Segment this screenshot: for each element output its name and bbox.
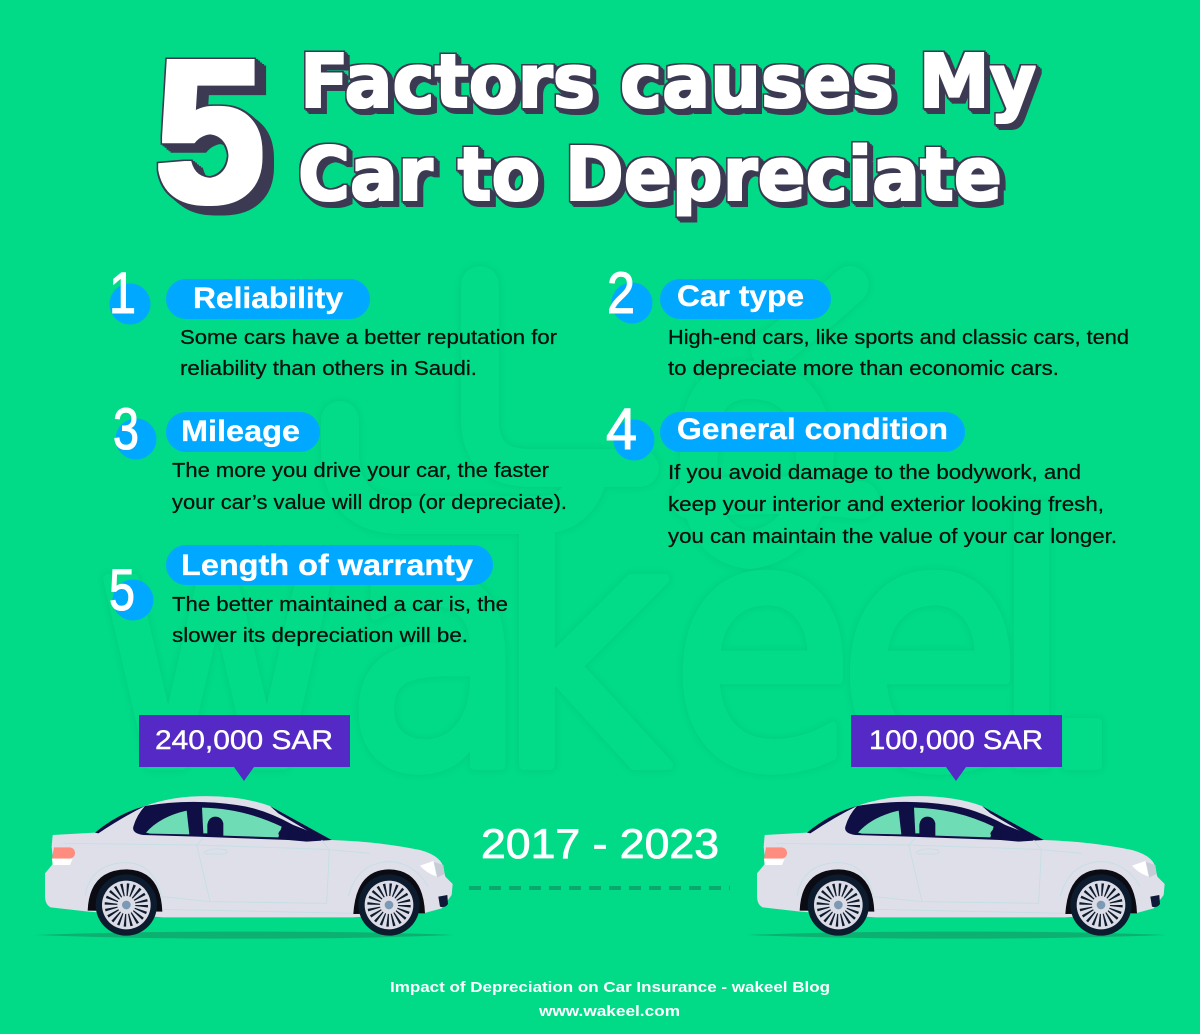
footer xyxy=(390,979,830,1020)
factor 2: car type: Car type xyxy=(677,280,804,313)
price tag: 240,000 SAR: 240,000 SAR xyxy=(155,725,333,755)
factor 2: car type: to depreciate more than economic cars. xyxy=(668,358,1059,380)
car: after xyxy=(747,796,1165,939)
factor 2: car type: High-end cars, like sports and classic cars, tend xyxy=(668,327,1129,349)
factor 2: car type xyxy=(607,261,1129,380)
factor 4: general condition: If you avoid damage to the bodywork, and xyxy=(668,462,1081,484)
factor 3: mileage: 3 xyxy=(113,397,139,462)
factor 3: mileage xyxy=(113,397,567,514)
car: before xyxy=(35,796,453,939)
factor 5: length of warranty: slower its depreciation will be. xyxy=(172,625,468,647)
factor 3: mileage: Mileage xyxy=(181,415,300,448)
year range: 2017 - 2023 xyxy=(481,820,719,867)
factor 4: general condition: General condition xyxy=(677,413,948,446)
title: heading xyxy=(298,39,1036,218)
dashed timeline xyxy=(469,886,730,890)
factor 4: general condition: keep your interior and exterior looking fresh, xyxy=(668,494,1104,516)
factor 3: mileage: The more you drive your car, the faster xyxy=(172,460,549,482)
factor 4: general condition: you can maintain the value of your car longer. xyxy=(668,526,1117,548)
price tag: 100,000 SAR: 100,000 SAR xyxy=(869,725,1043,755)
factor 3: mileage: your car’s value will drop (or depreciate). xyxy=(172,492,567,514)
title: heading: Factors causes My xyxy=(300,39,1036,125)
factor 4: general condition xyxy=(606,397,1117,548)
factor 1: reliability: Some cars have a better reputation for xyxy=(180,327,557,349)
title: heading: Car to Depreciate xyxy=(298,132,1002,218)
watermark: wakeel logo: wakeel. xyxy=(95,450,1130,846)
factor 2: car type: 2 xyxy=(607,261,635,326)
factor 1: reliability: Reliability xyxy=(193,282,343,315)
factor 1: reliability xyxy=(109,261,557,380)
price tag: 100,000 SAR xyxy=(851,715,1062,781)
factor 5: length of warranty: 5 xyxy=(109,558,135,623)
factor 1: reliability: 1 xyxy=(109,261,136,326)
footer: www.wakeel.com xyxy=(538,1003,680,1020)
factor 5: length of warranty: Length of warranty xyxy=(181,549,473,582)
footer: Impact of Depreciation on Car Insurance - wakeel Blog xyxy=(390,979,830,996)
factor 5: length of warranty: The better maintained a car is, the xyxy=(172,594,508,616)
price tag: 240,000 SAR xyxy=(139,715,350,781)
factor 5: length of warranty xyxy=(109,545,508,647)
factor 4: general condition: 4 xyxy=(606,397,637,462)
title: big number 5: 5 xyxy=(155,18,265,244)
factor 1: reliability: reliability than others in Saudi. xyxy=(180,358,477,380)
